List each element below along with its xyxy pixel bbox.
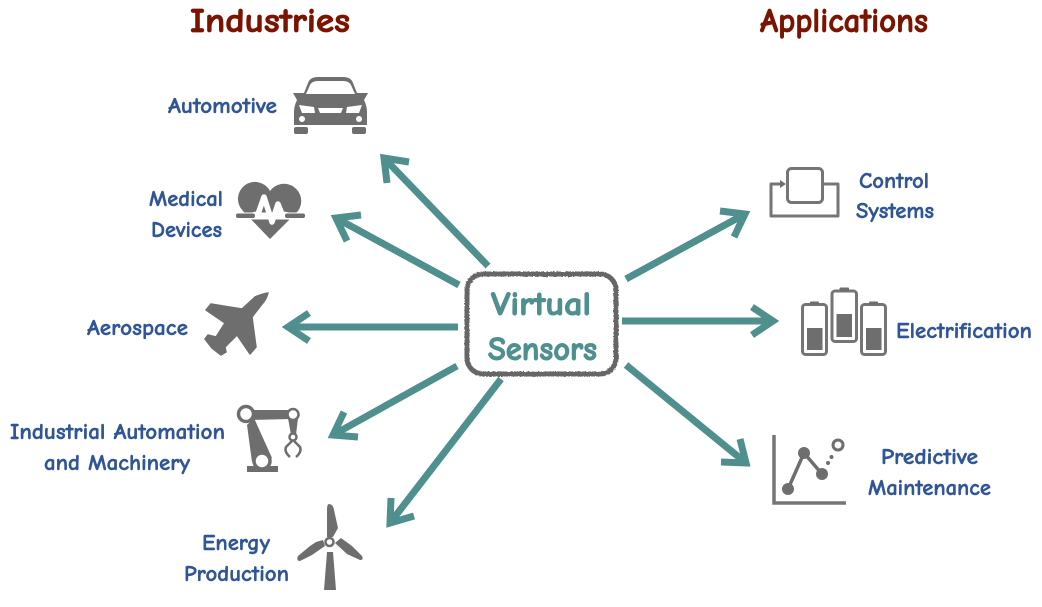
label: Medical Devices (149, 186, 223, 243)
label: Medical Devices: Medical (149, 186, 223, 212)
icon: airplane (205, 293, 268, 355)
arrow to Control Systems (626, 211, 745, 279)
label: Control Systems (856, 168, 934, 224)
label: Virtual: Virtual (491, 286, 591, 324)
arrow to Aerospace (288, 313, 458, 341)
arrow to Energy Production (390, 379, 501, 523)
central box: Virtual Sensors (467, 274, 616, 374)
icon: trend chart (774, 435, 846, 503)
label: Electrification: Electrification (896, 318, 1032, 344)
icon: wind turbine (297, 504, 363, 590)
label: Energy Production (184, 530, 289, 587)
icon: control loop (771, 168, 838, 216)
arrow to Predictive Maintenance (626, 365, 746, 463)
label: Sensors: Sensors (488, 331, 597, 369)
label: Industrial Automation and Machinery: and Machinery (44, 450, 191, 476)
icon: batteries (802, 288, 886, 354)
heading: Applications: Applications (760, 1, 928, 41)
label: Control Systems: Systems (856, 198, 934, 224)
label: Predictive Maintenance: Predictive (881, 444, 978, 470)
label: Automotive: Automotive (168, 93, 277, 119)
label: Predictive Maintenance: Maintenance (868, 475, 991, 501)
icon: heart with pulse (232, 182, 308, 239)
label: Industrial Automation and Machinery (10, 419, 225, 476)
arrow to Automotive (384, 158, 488, 266)
label: Aerospace: Aerospace (87, 315, 188, 341)
heading: Industries: Industries (190, 1, 350, 41)
box outline (467, 274, 616, 374)
arrow to Medical Devices (336, 215, 459, 285)
arrow to Industrial Automation (333, 366, 457, 437)
label: Predictive Maintenance (868, 444, 991, 501)
label: Control Systems: Control (859, 168, 929, 194)
icon: robot arm (238, 406, 300, 472)
icon: car (293, 77, 368, 134)
arrow to Electrification (622, 307, 773, 335)
label: Medical Devices: Devices (151, 217, 222, 243)
label: Energy Production: Production (184, 561, 289, 587)
label: Energy Production: Energy (202, 530, 271, 556)
label: Industrial Automation and Machinery: Industrial Automation (10, 419, 225, 445)
